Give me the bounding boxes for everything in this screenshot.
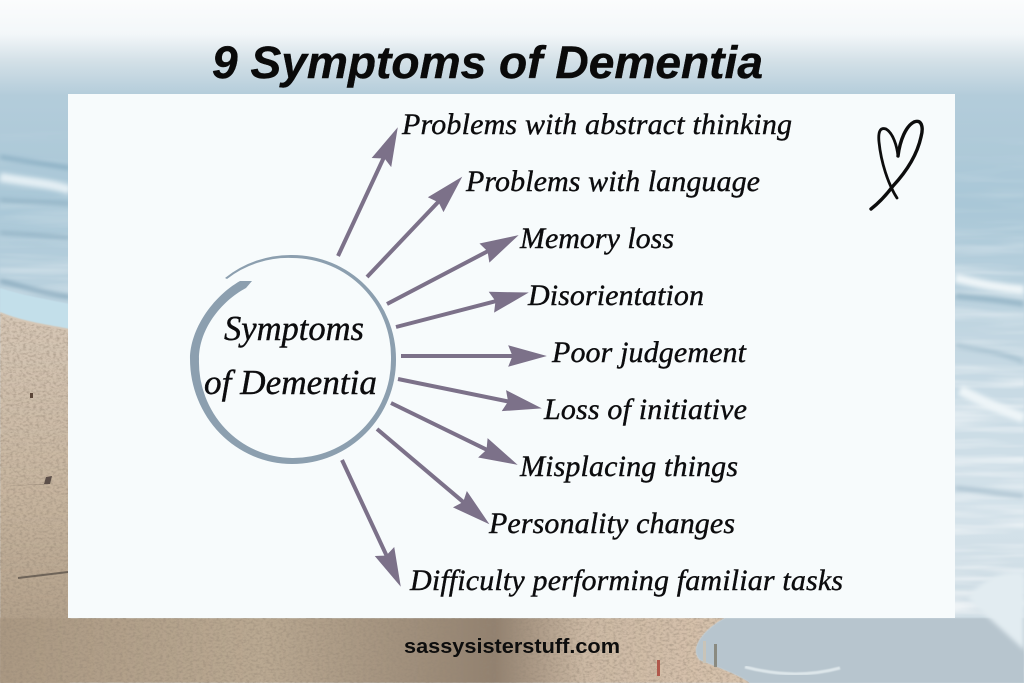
arrow: poor judgement <box>401 346 545 366</box>
arrow: loss of initiative <box>398 379 540 411</box>
label: abstract thinking: Problems with abstract thinking <box>401 108 792 141</box>
arrow: personality changes <box>377 429 488 523</box>
label: familiar tasks: Difficulty performing familiar tasks <box>409 564 843 597</box>
arrows <box>338 129 545 585</box>
water, bottom right <box>696 618 1024 683</box>
arrow: misplacing things <box>391 403 516 464</box>
wet sand, left <box>0 288 70 332</box>
label: language: Problems with language <box>465 165 760 198</box>
arrow: disorientation <box>396 292 527 327</box>
label: loss of initiative: Loss of initiative <box>543 393 747 426</box>
footer website: sassysisterstuff.com <box>404 636 620 658</box>
foam, bottom right <box>968 572 1024 650</box>
symptom labels <box>401 108 843 597</box>
sand grain texture <box>0 314 750 683</box>
arrow: language <box>367 178 461 277</box>
title: 9 Symptoms of Dementia <box>212 37 763 88</box>
arrow: memory loss <box>387 236 517 304</box>
white panel <box>68 94 955 618</box>
sand, left <box>0 312 70 683</box>
circle: ring brush stroke <box>190 255 396 464</box>
label: misplacing things: Misplacing things <box>519 450 738 483</box>
circle label: of Dementia <box>204 363 377 402</box>
icon: hand-drawn heart <box>871 121 922 209</box>
arrow: familiar tasks <box>342 460 400 585</box>
circle label <box>204 309 377 402</box>
circle label: Symptoms <box>224 309 364 348</box>
arrow: abstract thinking <box>338 129 397 256</box>
tiny people on the beach <box>6 393 717 676</box>
label: disorientation: Disorientation <box>527 279 704 312</box>
label: poor judgement: Poor judgement <box>551 336 747 369</box>
sand, bottom <box>0 618 750 683</box>
label: personality changes: Personality changes <box>488 507 735 540</box>
label: memory loss: Memory loss <box>519 222 674 255</box>
